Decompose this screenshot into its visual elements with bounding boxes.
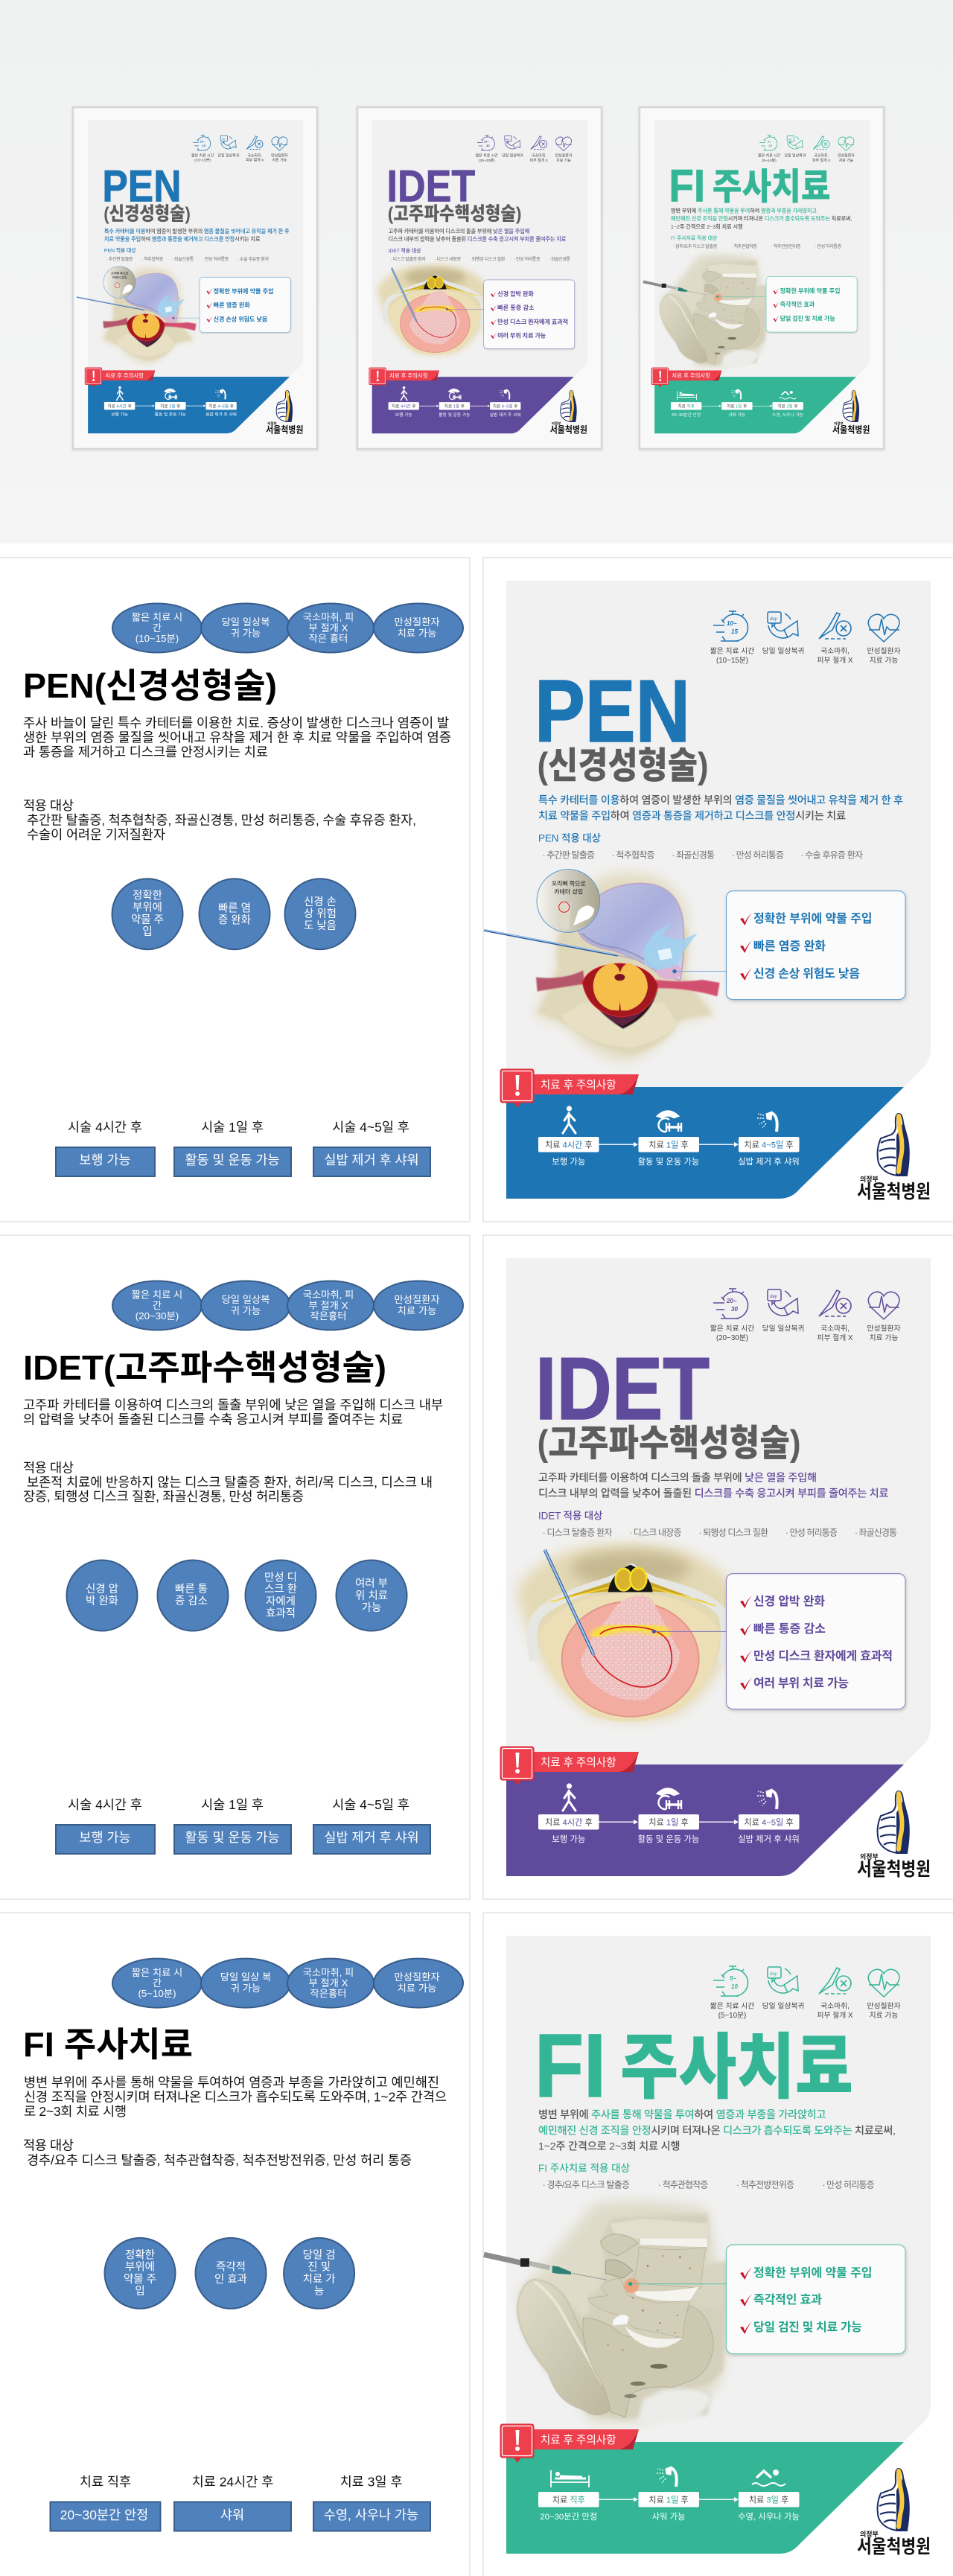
feature icons: 피부 절개 X: [817, 1333, 853, 1342]
post-treatment warning badge: [500, 1069, 639, 1108]
target list: · 디스크 탈출증 환자: [543, 1528, 612, 1538]
benefit circles: 스크 환: [264, 1583, 297, 1595]
target patients: 추간판 탈출증, 척추협착증, 좌골신경통, 만성 허리통증, 수술 후유증 환자,: [27, 813, 416, 828]
benefit circles: 인 효과: [214, 2273, 247, 2286]
recovery steps: 시술 1일 후: [201, 1120, 264, 1135]
recovery steps: 샤워 가능: [651, 2512, 686, 2522]
target heading: FI 주사치료 적용 대상: [538, 2163, 630, 2174]
inset: catheter entry: 카테터 삽입: [554, 887, 583, 895]
recovery steps: 활동 및 운동 가능: [638, 1156, 699, 1167]
feature ellipses: 국소마취, 피: [303, 1967, 354, 1978]
description: 의 압력을 낮추어 돌출된 디스크를 수축 응고시켜 부피를 줄여주는 치료: [23, 1412, 403, 1426]
benefit circles: 정확한: [133, 889, 162, 902]
description: [538, 1473, 889, 1500]
target heading: PEN 적용 대상: [538, 832, 601, 844]
recovery steps: [538, 1106, 800, 1167]
recovery steps: 시술 4시간 후: [68, 1120, 142, 1135]
feature ellipses: 만성질환자: [394, 1294, 440, 1305]
callout: benefits: 신경 손상 위험도 낮음: [753, 967, 860, 981]
feature icons: 치료 가능: [870, 2011, 898, 2020]
callout: benefits: 빠른 염증 완화: [753, 940, 826, 953]
feature ellipses: [112, 1959, 463, 2008]
logo: 의정부: [860, 1175, 879, 1183]
benefit circles: 입: [142, 925, 153, 938]
inset: catheter entry: [537, 870, 600, 932]
description: 과 통증을 제거하고 디스크를 안정시키는 치료: [23, 745, 268, 759]
feature ellipses: [112, 1281, 463, 1330]
feature ellipses: 작은 흉터: [309, 633, 348, 644]
callout: benefits: 신경 압박 완화: [753, 1595, 825, 1608]
benefit circles: 빠른 염: [218, 902, 251, 915]
callout: benefits: 당일 검진 및 치료 가능: [753, 2321, 862, 2334]
inset: catheter entry: 꼬리뼈 쪽으로: [552, 879, 586, 887]
benefit circles: 자에게: [266, 1595, 296, 1608]
callout: benefits: [727, 2245, 905, 2354]
recovery steps: 치료 직후: [552, 2496, 585, 2505]
feature ellipses: 국소마취, 피: [303, 1289, 354, 1300]
description: 고주파 카테터를 이용하여 디스크의 돌출 부위에 낮은 열을 주입해 디스크 내부: [23, 1397, 443, 1412]
recovery steps: 시술 4시간 후: [68, 1797, 142, 1812]
benefit circles: 약물 주: [131, 914, 164, 926]
title: PEN(신경성형술): [23, 666, 277, 705]
feature icons: 피부 절개 X: [817, 655, 853, 665]
feature icons: [710, 1289, 901, 1342]
benefit circles: 신경 손: [304, 896, 337, 908]
feature ellipses: 귀 가능: [231, 628, 261, 639]
feature ellipses: 작은흉터: [310, 1988, 346, 1999]
recovery steps: 치료 1일 후: [648, 2494, 689, 2505]
feature ellipses: 간: [153, 1300, 162, 1311]
target patients: 적용 대상: [23, 2138, 74, 2153]
feature icons: 짧은 치료 시간: [710, 646, 754, 655]
feature ellipses: 간: [153, 1977, 162, 1989]
recovery steps: 치료 1일 후: [648, 1139, 689, 1150]
recovery steps: 치료 4~5일 후: [744, 1139, 794, 1150]
panel: PEN poster frame: [483, 558, 953, 1222]
post-treatment warning badge: 치료 후 주의사항: [541, 1079, 616, 1091]
description: 특수 카테터를 이용하여 염증이 발생한 부위의 염증 물질을 씻어내고 유착을 제거 한 후: [538, 795, 903, 807]
feature ellipses: 귀 가능: [231, 1983, 261, 1994]
feature icons: 10: [731, 1983, 738, 1990]
target patients: 장증, 퇴행성 디스크 질환, 좌골신경통, 만성 허리통증: [23, 1489, 304, 1504]
recovery steps: 실밥 제거 후 샤워: [738, 1157, 800, 1167]
illustration: lumbar spine with syringe: [484, 2201, 730, 2422]
feature ellipses: 짧은 치료 시: [132, 1289, 182, 1300]
recovery steps: 치료 4~5일 후: [744, 1817, 794, 1827]
panel: FI draft: [0, 1913, 470, 2576]
description: 고주파 카테터를 이용하여 디스크의 돌출 부위에 낮은 열을 주입해: [538, 1473, 817, 1485]
feature ellipses: 당일 일상복: [222, 1294, 270, 1305]
recovery steps: 보행 가능: [79, 1152, 131, 1167]
feature icons: (10~15분): [716, 656, 748, 665]
target patients: 적용 대상: [23, 798, 74, 813]
feature ellipses: 치료 가능: [398, 1983, 436, 1994]
description: 생한 부위의 염증 물질을 씻어내고 유착을 제거 한 후 치료 약물을 주입하여 염증: [23, 730, 451, 745]
feature icons: 만성질환자: [867, 646, 901, 655]
feature icons: 당일 일상복귀: [762, 646, 804, 655]
benefit circles: [112, 879, 356, 949]
recovery steps: 치료 3일 후: [749, 2494, 788, 2505]
callout: benefits: [727, 891, 905, 1000]
benefit circles: 도 낮음: [304, 919, 337, 932]
recovery steps: 실밥 제거 후 샤워: [324, 1830, 419, 1845]
subtitle: (고주파수핵성형술): [538, 1424, 801, 1464]
feature icons: (20~30분): [716, 1333, 748, 1342]
feature ellipses: 짧은 치료 시: [132, 612, 182, 622]
feature ellipses: 부 절개 X: [309, 622, 348, 634]
description: 예민해진 신경 조직을 안정시키며 터져나온 디스크가 흡수되도록 도와주는 치료로써,: [538, 2124, 896, 2137]
benefit circles: [104, 2238, 354, 2309]
callout: benefits: [727, 1574, 905, 1709]
recovery steps: 시술 1일 후: [201, 1797, 264, 1812]
panel: IDET draft: [0, 1235, 470, 1899]
recovery steps: 활동 및 운동 가능: [185, 1830, 280, 1845]
benefit circles: 증 완화: [218, 914, 251, 926]
recovery steps: 실밥 제거 후 샤워: [324, 1152, 419, 1167]
recovery steps: 시술 4~5일 후: [332, 1797, 409, 1812]
benefit circles: 정확한: [125, 2248, 155, 2262]
logo: 서울척병원: [857, 1859, 931, 1880]
feature icons: 만성질환자: [867, 2001, 901, 2010]
target patients: 보존적 치료에 반응하지 않는 디스크 탈출증 환자, 허리/목 디스크, 디스크 내: [27, 1475, 433, 1490]
feature icons: 15: [731, 628, 738, 635]
recovery steps: 수영, 사우나 가능: [738, 2512, 800, 2522]
benefit circles: 당일 검: [303, 2248, 336, 2262]
description: [538, 795, 903, 823]
recovery steps: 실밥 제거 후 샤워: [738, 1834, 800, 1844]
recovery steps: 수영, 사우나 가능: [324, 2508, 418, 2522]
feature ellipses: [112, 603, 463, 652]
recovery steps: 20~30분간 안정: [60, 2508, 148, 2522]
mockup: framed FI poster: [640, 107, 884, 449]
feature icons: 20~: [726, 1298, 737, 1304]
benefit circles: [67, 1560, 407, 1630]
feature ellipses: 부 절개 X: [309, 1300, 348, 1311]
feature ellipses: 부 절개 X: [309, 1977, 348, 1989]
feature icons: [710, 611, 901, 665]
feature icons: 당일 일상복귀: [762, 2001, 804, 2010]
target patients: [23, 798, 416, 842]
benefit circles: 증 감소: [175, 1595, 208, 1607]
recovery steps: 치료 24시간 후: [192, 2475, 273, 2490]
feature ellipses: 작은흉터: [310, 1310, 346, 1322]
post-treatment warning badge: 치료 후 주의사항: [541, 1756, 616, 1769]
panel: PEN draft: [0, 558, 470, 1222]
benefit circles: 효과적: [266, 1607, 296, 1620]
feature ellipses: 귀 가능: [231, 1305, 261, 1316]
description: [538, 2109, 896, 2153]
feature icons: 피부 절개 X: [817, 2010, 853, 2020]
callout: benefits: 정확한 부위에 약물 주입: [753, 2266, 873, 2280]
benefit circles: 신경 압: [86, 1583, 118, 1595]
target list: · 수술 후유증 환자: [801, 850, 863, 861]
recovery steps: 보행 가능: [552, 1157, 585, 1167]
target patients: [23, 2138, 412, 2168]
feature ellipses: 만성질환자: [394, 1971, 440, 1983]
background wall of the poster mockup: [0, 0, 953, 543]
target list: [543, 1526, 897, 1538]
target list: · 경추/요추 디스크 탈출증: [543, 2180, 630, 2190]
target list: · 디스크 내장증: [629, 1528, 682, 1538]
target heading: IDET 적용 대상: [538, 1510, 602, 1522]
description: 치료 약물을 주입하여 염증과 통증을 제거하고 디스크를 안정시키는 치료: [538, 811, 846, 823]
feature icons: 국소마취,: [820, 2001, 850, 2010]
recovery steps: 치료 직후: [80, 2475, 131, 2490]
poster: PEN: [484, 581, 931, 1202]
benefit circles: 부위에: [133, 901, 162, 914]
big title: PEN: [535, 662, 690, 761]
target list: [543, 850, 863, 861]
recovery steps: [51, 2475, 430, 2531]
poster: IDET: [500, 1258, 931, 1880]
feature icons: 짧은 치료 시간: [710, 1324, 754, 1333]
benefit circles: 가능: [362, 1601, 381, 1614]
post-treatment warning badge: [500, 2424, 639, 2463]
title: IDET(고주파수핵성형술): [23, 1348, 386, 1387]
feature ellipses: (5~10분): [138, 1988, 176, 1999]
feature ellipses: 치료 가능: [398, 1305, 436, 1316]
feature icons: 만성질환자: [867, 1324, 901, 1333]
callout: benefits: 만성 디스크 환자에게 효과적: [753, 1650, 893, 1663]
description: 로 2~3회 치료 시행: [24, 2104, 127, 2119]
feature icons: 국소마취,: [820, 646, 850, 655]
description: 신경 조직을 안정시키며 터져나온 디스크가 흡수되도록 도와주며, 1~2주 간격으: [24, 2089, 447, 2104]
recovery steps: 샤워: [220, 2508, 244, 2522]
logo: [857, 2469, 931, 2557]
callout: benefits: 정확한 부위에 약물 주입: [753, 912, 873, 925]
description: 주사 바늘이 달린 특수 카테터를 이용한 치료. 증상이 발생한 디스크나 염증이 발: [23, 715, 449, 730]
recovery steps: 치료 4시간 후: [545, 1818, 593, 1827]
recovery steps: 보행 가능: [552, 1834, 585, 1844]
feature icons: day: [770, 1295, 778, 1299]
recovery steps: 활동 및 운동 가능: [185, 1152, 280, 1167]
subtitle: (신경성형술): [538, 746, 709, 786]
target list: · 추간판 탈출증: [543, 850, 595, 861]
benefit circles: 진 및: [307, 2261, 331, 2274]
feature icons: 30: [731, 1306, 738, 1313]
benefit circles: 부위에: [125, 2261, 155, 2274]
title: FI 주사치료: [23, 2025, 193, 2064]
benefit circles: 위 치료: [355, 1590, 388, 1602]
feature ellipses: 만성질환자: [394, 616, 440, 628]
benefit circles: 빠른 통: [175, 1583, 208, 1595]
target patients: 수술이 어려운 기저질환자: [27, 827, 165, 842]
target list: [543, 2180, 875, 2190]
logo: 서울척병원: [857, 2537, 931, 2557]
illustration: disc cross-section: [516, 1543, 739, 1722]
benefit circles: 상 위험: [304, 908, 337, 920]
feature ellipses: 당일 일상복: [222, 616, 270, 628]
feature icons: 짧은 치료 시간: [710, 2001, 754, 2010]
description: 병변 부위에 주사를 통해 약물을 투여하여 염증과 부종을 가라앉히고 예민해진: [24, 2075, 439, 2090]
target patients: 경추/요추 디스크 탈출증, 척추관협착증, 척추전방전위증, 만성 허리 통증: [27, 2153, 412, 2168]
recovery steps: 치료 1일 후: [648, 1817, 689, 1827]
logo: [857, 1114, 931, 1202]
target list: · 척추관협착증: [658, 2180, 708, 2190]
description: 1~2주 간격으로 2~3회 치료 시행: [538, 2141, 681, 2153]
recovery steps: 시술 4~5일 후: [332, 1120, 409, 1135]
feature icons: 치료 가능: [870, 656, 898, 665]
recovery steps: 치료 3일 후: [340, 2475, 402, 2490]
recovery steps: 치료 4시간 후: [545, 1141, 593, 1150]
big title: IDET: [535, 1339, 710, 1438]
feature icons: [710, 1966, 901, 2020]
logo: 의정부: [860, 2530, 879, 2538]
target list: · 좌골신경통: [672, 850, 715, 861]
benefit circles: 즉각적: [216, 2261, 246, 2274]
feature ellipses: 짧은 치료 시: [132, 1967, 182, 1978]
description: 병변 부위에 주사를 통해 약물을 투여하여 염증과 부종을 가라앉히고: [538, 2109, 826, 2121]
benefit circles: 여러 부: [355, 1577, 388, 1590]
logo: [857, 1791, 931, 1880]
feature icons: 치료 가능: [870, 1333, 898, 1342]
feature icons: 5~: [730, 1975, 736, 1982]
feature ellipses: 당일 일상 복: [220, 1971, 271, 1983]
callout: benefits: 즉각적인 효과: [753, 2293, 822, 2306]
big title: [535, 2015, 853, 2116]
target patients: [23, 1461, 433, 1504]
feature ellipses: (20~30분): [136, 1310, 179, 1322]
target list: · 만성 허리통증: [732, 850, 784, 861]
post-treatment warning badge: 치료 후 주의사항: [541, 2434, 616, 2446]
target list: · 척추협착증: [612, 850, 655, 861]
target list: · 좌골신경통: [855, 1528, 897, 1538]
post-treatment warning badge: [500, 1747, 639, 1785]
benefit circles: 박 완화: [86, 1595, 118, 1607]
recovery steps: 20~30분간 안정: [540, 2512, 597, 2522]
feature icons: day: [770, 1972, 778, 1977]
description: [23, 1397, 443, 1426]
target list: · 퇴행성 디스크 질환: [698, 1526, 768, 1538]
target patients: 적용 대상: [23, 1461, 74, 1476]
feature ellipses: 간: [153, 622, 162, 634]
big title: 주사치료: [620, 2028, 853, 2108]
target list: · 만성 허리통증: [785, 1528, 838, 1538]
description: [23, 715, 451, 759]
recovery steps: 보행 가능: [79, 1830, 131, 1845]
benefit circles: 치료 가: [303, 2273, 336, 2286]
feature ellipses: 국소마취, 피: [303, 612, 354, 622]
description: [24, 2075, 447, 2119]
benefit circles: 능: [314, 2285, 324, 2298]
recovery steps: [56, 1797, 430, 1854]
recovery steps: [538, 1783, 800, 1844]
panel: FI poster frame: [483, 1913, 953, 2576]
benefit circles: 약물 주: [124, 2273, 156, 2286]
feature icons: (5~10분): [718, 2011, 746, 2020]
target list: · 척추전방전위증: [736, 2180, 794, 2190]
feature icons: day: [770, 617, 778, 622]
feature icons: 국소마취,: [820, 1324, 850, 1333]
recovery steps: 활동 및 운동 가능: [638, 1834, 699, 1844]
benefit circles: 입: [135, 2285, 145, 2298]
callout: benefits: 빠른 통증 감소: [753, 1622, 826, 1636]
feature ellipses: 치료 가능: [398, 628, 436, 639]
feature ellipses: (10~15분): [136, 633, 179, 644]
logo: 의정부: [860, 1852, 879, 1861]
description: 디스크 내부의 압력을 낮추어 돌출된 디스크를 수축 응고시켜 부피를 줄여주는 치료: [538, 1488, 889, 1500]
poster: FI: [484, 1936, 931, 2557]
illustration: vertebra with catheter: [484, 870, 726, 1062]
benefit circles: 만성 디: [264, 1571, 297, 1584]
panel: IDET poster frame: [483, 1235, 953, 1899]
big title: FI: [535, 2015, 606, 2116]
recovery steps: [56, 1120, 430, 1176]
feature icons: 당일 일상복귀: [762, 1324, 804, 1333]
mockup: framed IDET poster: [357, 107, 602, 449]
target list: · 만성 허리통증: [822, 2180, 875, 2190]
mockup: framed PEN poster: [73, 107, 317, 449]
callout: benefits: 여러 부위 치료 가능: [753, 1677, 849, 1690]
recovery steps: [538, 2467, 800, 2522]
logo: 서울척병원: [857, 1182, 931, 1202]
feature icons: 10~: [727, 620, 737, 627]
